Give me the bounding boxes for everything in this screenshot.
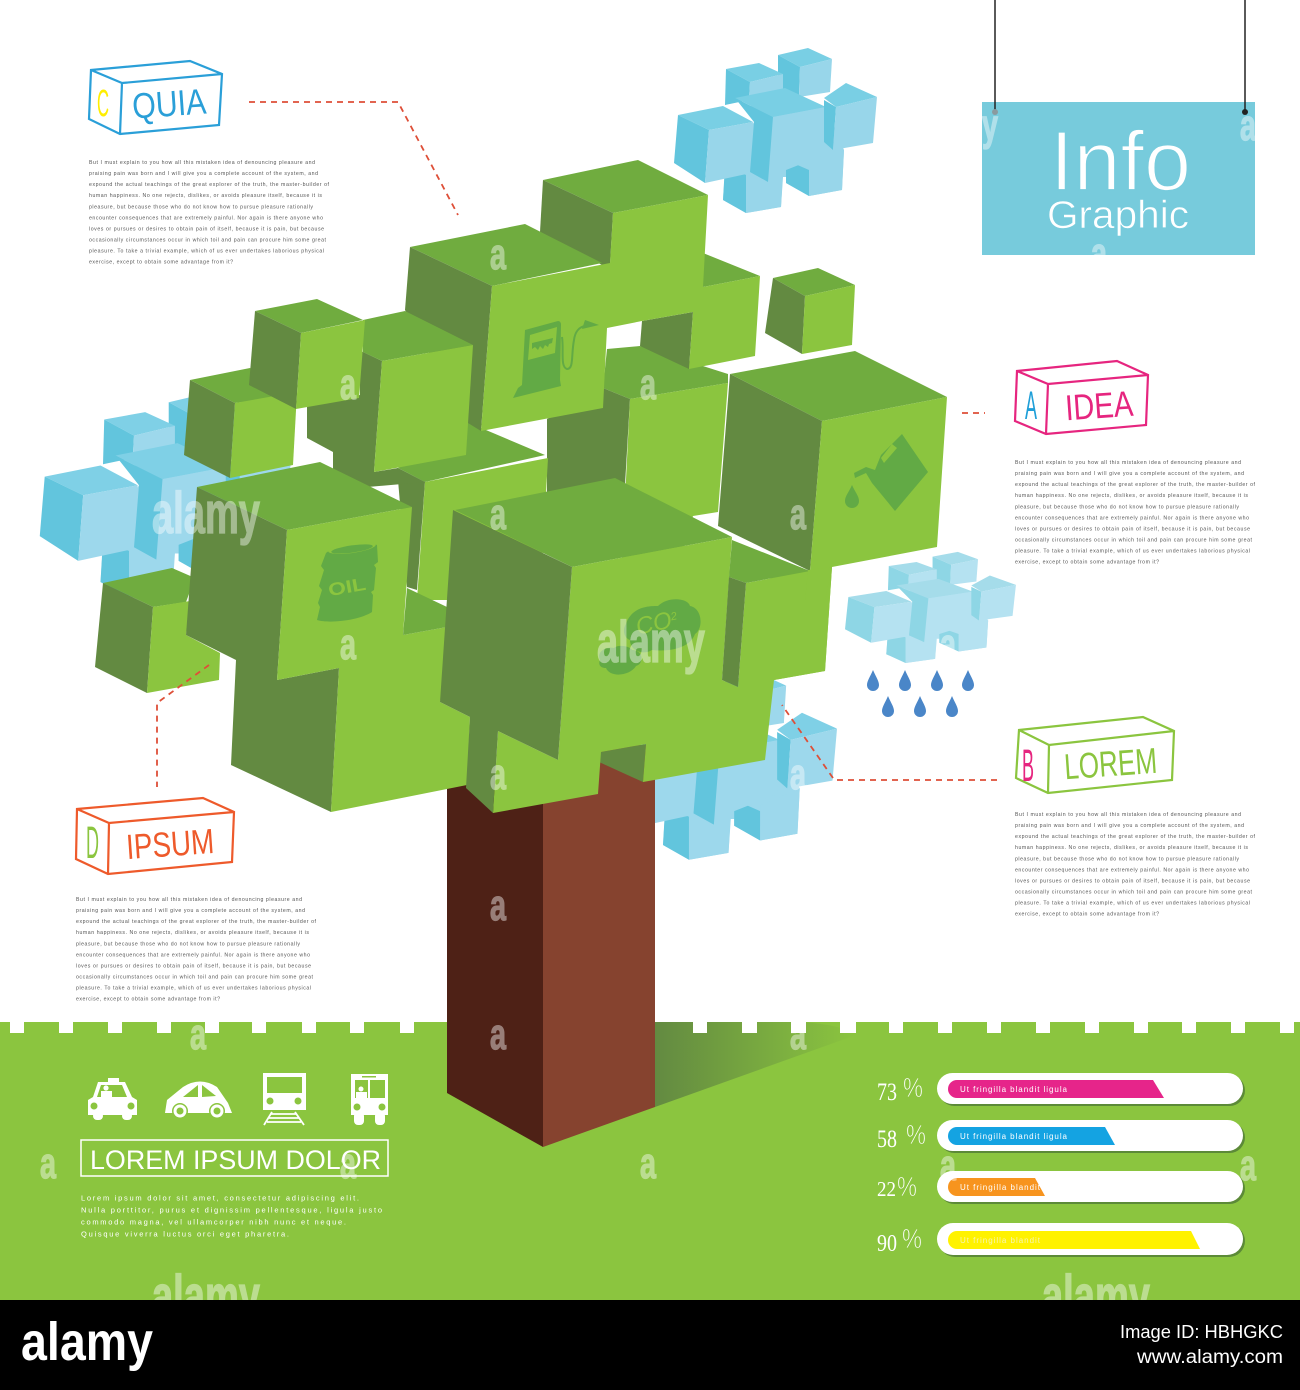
cube: middle right behind	[547, 346, 728, 560]
icon: fuel pump	[513, 320, 599, 398]
progress bar: 22%: 22	[877, 1177, 896, 1201]
paragraph: A: But I must explain to you how all this mistaken idea of denouncing pleasure and	[1015, 460, 1241, 466]
progress bar: 73%: 73	[877, 1079, 897, 1106]
progress bar: 58%	[877, 1119, 1245, 1153]
paragraph: C: occasionally circumstances occur in which toil and pain can procure him some great	[89, 237, 327, 243]
label box: A IDEA: A	[1025, 384, 1037, 428]
watermarks: a	[490, 881, 506, 930]
icon: oil barrel: OIL	[327, 574, 367, 600]
paragraph: A: encounter consequences that are extremely painful. Nor again is there anyone who	[1015, 515, 1249, 521]
watermarks: y	[982, 101, 998, 150]
cube: top block	[540, 160, 708, 265]
paragraph: D: praising pain was born and I will give you a complete account of the system, and	[76, 908, 305, 914]
cube: fuel pump block	[405, 195, 760, 431]
paragraph: A: exercise, except to obtain some advantage from it?	[1015, 560, 1159, 566]
label box: D IPSUM: D	[86, 817, 99, 868]
label box: A IDEA: IDEA	[1064, 383, 1134, 428]
icon: oil barrel	[317, 540, 378, 622]
cube: small upper left	[249, 299, 365, 409]
label box: D IPSUM	[76, 798, 234, 874]
paragraph: A: expound the actual teachings of the great explorer of the truth, the master-builder of	[1015, 482, 1256, 488]
watermarks: a	[340, 1139, 356, 1188]
watermarks: a	[340, 620, 356, 669]
text block: grass description: Quisque viverra luctus orci eget pharetra.	[81, 1230, 289, 1238]
rain drops	[867, 670, 974, 717]
callout connector lines	[157, 102, 997, 787]
progress bar: 22%: %	[897, 1171, 917, 1202]
icon: co2 cloud: CO	[633, 607, 674, 641]
icon: car	[165, 1082, 232, 1119]
paragraph: D	[76, 897, 317, 1003]
watermarks: a	[490, 1010, 506, 1059]
paragraph: C: exercise, except to obtain some advantage from it?	[89, 260, 233, 266]
cube: oil block	[186, 462, 470, 812]
watermarks: a	[40, 1139, 56, 1188]
paragraph: B: human happiness. No one rejects, dislikes, or avoids pleasure itself, because it is	[1015, 845, 1248, 851]
watermarks: alamy	[152, 1264, 260, 1329]
paragraph: D: loves or pursues or desires to obtain pain of itself, because it is pain, but because	[76, 963, 311, 969]
watermarks: a	[190, 1010, 206, 1059]
text block: grass description	[81, 1194, 382, 1238]
label box: B LOREM: B	[1022, 740, 1034, 791]
paragraph: D: pleasure, but because those who do not know how to pursue pleasure rationally	[76, 941, 300, 947]
paragraph: C: loves or pursues or desires to obtain pain of itself, because it is pain, but because	[89, 226, 324, 232]
progress bar: 90%: 90	[877, 1231, 897, 1257]
progress bar: 73%: Ut fringilla blandit ligula	[960, 1085, 1068, 1094]
cube: upper left	[184, 368, 300, 478]
text block: grass description: Nulla porttitor, purus et dignissim pellentesque, ligula justo	[81, 1206, 382, 1214]
progress bar: 73%: %	[903, 1072, 923, 1103]
text block: grass description: Lorem ipsum dolor sit amet, consectetur adipiscing elit.	[81, 1194, 359, 1202]
cube: centre behind	[397, 422, 548, 600]
label box: C QUIA: C	[97, 83, 109, 125]
paragraph: C: But I must explain to you how all this mistaken idea of denouncing pleasure and	[89, 160, 315, 166]
watermarks: a	[790, 1010, 806, 1059]
paragraph: D: occasionally circumstances occur in which toil and pain can procure him some great	[76, 974, 314, 980]
label box: C QUIA: QUIA	[131, 80, 207, 127]
icon: co2 cloud: 2	[669, 610, 678, 624]
paragraph: C: pleasure. To take a trivial example, which of us ever undertakes laborious physical	[89, 249, 324, 255]
paragraph: A: pleasure, but because those who do not know how to pursue pleasure rationally	[1015, 504, 1239, 510]
watermarks: a	[640, 360, 656, 409]
label box: B LOREM	[1016, 717, 1174, 793]
icon: bus	[351, 1074, 388, 1125]
paragraph: D: expound the actual teachings of the great explorer of the truth, the master-builder of	[76, 919, 317, 925]
paragraph: B: expound the actual teachings of the great explorer of the truth, the master-builder of	[1015, 834, 1256, 840]
progress bar: 90%: %	[902, 1223, 922, 1254]
footer bar: Image ID: HBHGKC	[1120, 1322, 1283, 1342]
footer bar: www.alamy.com	[1136, 1347, 1283, 1368]
watermarks: a	[940, 620, 956, 669]
cube: large co2 block	[440, 478, 832, 813]
watermarks: a	[490, 750, 506, 799]
grass ground	[0, 1022, 1300, 1300]
watermarks: alamy	[597, 610, 705, 675]
paragraph: A: praising pain was born and I will give you a complete account of the system, and	[1015, 471, 1244, 477]
watermarks: a	[1091, 229, 1107, 278]
paragraph: C: pleasure, but because those who do not know how to pursue pleasure rationally	[89, 204, 313, 210]
footer bar	[0, 1300, 1300, 1390]
tree trunk	[447, 745, 655, 1147]
text block: grass description: commodo magna, vel ullamcorper nibh nunc et neque.	[81, 1218, 346, 1226]
paragraph: A: loves or pursues or desires to obtain pain of itself, because it is pain, but because	[1015, 526, 1250, 532]
icon: taxi	[88, 1078, 137, 1120]
cloud: rain cloud	[845, 552, 1016, 663]
progress bar: 58%: %	[906, 1119, 926, 1150]
watermarks: a	[490, 490, 506, 539]
cube: right big with jerry can	[718, 351, 947, 680]
paragraph: B: occasionally circumstances occur in which toil and pain can procure him some great	[1015, 889, 1253, 895]
paragraph: C: expound the actual teachings of the great explorer of the truth, the master-builder of	[89, 182, 330, 188]
label box: C QUIA	[89, 61, 222, 134]
paragraph: C: human happiness. No one rejects, dislikes, or avoids pleasure itself, because it is	[89, 193, 322, 199]
heading box: lorem ipsum dolor: LOREM IPSUM DOLOR	[90, 1145, 381, 1175]
paragraph: D: exercise, except to obtain some advantage from it?	[76, 997, 220, 1003]
progress bar: 73%	[877, 1072, 1245, 1106]
paragraph: D: But I must explain to you how all this mistaken idea of denouncing pleasure and	[76, 897, 302, 903]
paragraph: B: loves or pursues or desires to obtain pain of itself, because it is pain, but because	[1015, 878, 1250, 884]
paragraph: A: occasionally circumstances occur in which toil and pain can procure him some great	[1015, 537, 1253, 543]
cloud: bottom right behind tree	[608, 673, 837, 860]
cube: small floating	[765, 268, 855, 354]
cube: upper centre	[307, 311, 473, 490]
paragraph: C: praising pain was born and I will give you a complete account of the system, and	[89, 171, 318, 177]
paragraph: C	[89, 160, 330, 266]
watermarks: a	[790, 750, 806, 799]
hanging sign: Graphic	[1047, 194, 1189, 237]
watermarks: a	[790, 490, 806, 539]
paragraph: A	[1015, 460, 1256, 566]
cloud: top right	[674, 48, 877, 213]
paragraph: B	[1015, 812, 1256, 918]
paragraph: B: pleasure, but because those who do not know how to pursue pleasure rationally	[1015, 856, 1239, 862]
paragraph: B: pleasure. To take a trivial example, which of us ever undertakes laborious physical	[1015, 901, 1250, 907]
label box: D IPSUM: IPSUM	[125, 822, 215, 867]
watermarks: a	[340, 360, 356, 409]
paragraph: B: exercise, except to obtain some advantage from it?	[1015, 912, 1159, 918]
footer bar: alamy	[21, 1312, 153, 1372]
paragraph: C: encounter consequences that are extremely painful. Nor again is there anyone who	[89, 215, 323, 221]
cloud: left behind tree	[40, 394, 291, 598]
icon: jerry can	[845, 434, 928, 511]
paragraph: D: encounter consequences that are extremely painful. Nor again is there anyone who	[76, 952, 310, 958]
hanging sign: Info	[1050, 114, 1191, 208]
icon: train	[263, 1073, 306, 1125]
label box: A IDEA	[1015, 361, 1148, 434]
progress bar: 22%	[877, 1171, 1245, 1204]
paragraph: A: pleasure. To take a trivial example, which of us ever undertakes laborious physical	[1015, 549, 1250, 555]
paragraph: D: pleasure. To take a trivial example, which of us ever undertakes laborious physical	[76, 986, 311, 992]
watermarks: a	[640, 1139, 656, 1188]
progress bar: 58%: 58	[877, 1126, 897, 1153]
watermarks: a	[1240, 1141, 1256, 1190]
progress bar: 58%: Ut fringilla blandit ligula	[960, 1132, 1068, 1141]
cube: lower left	[95, 568, 220, 693]
watermarks: alamy	[1042, 1264, 1150, 1329]
paragraph: B: But I must explain to you how all this mistaken idea of denouncing pleasure and	[1015, 812, 1241, 818]
progress bar: 90%	[877, 1223, 1245, 1257]
paragraph: B: praising pain was born and I will give you a complete account of the system, and	[1015, 823, 1244, 829]
icon: co2 cloud	[599, 599, 701, 675]
watermarks: a	[490, 230, 506, 279]
label box: B LOREM: LOREM	[1063, 740, 1158, 787]
tree canopy	[95, 160, 947, 813]
watermarks: alamy	[152, 481, 260, 546]
paragraph: A: human happiness. No one rejects, dislikes, or avoids pleasure itself, because it is	[1015, 493, 1248, 499]
watermarks: a	[940, 1141, 956, 1190]
hanging sign	[982, 0, 1255, 255]
paragraph: D: human happiness. No one rejects, dislikes, or avoids pleasure itself, because it is	[76, 930, 309, 936]
progress bar: 22%: Ut fringilla blandit	[960, 1183, 1041, 1192]
watermarks: a	[1240, 101, 1256, 150]
paragraph: B: encounter consequences that are extremely painful. Nor again is there anyone who	[1015, 867, 1249, 873]
progress bar: 90%: Ut fringilla blandit	[960, 1236, 1041, 1245]
